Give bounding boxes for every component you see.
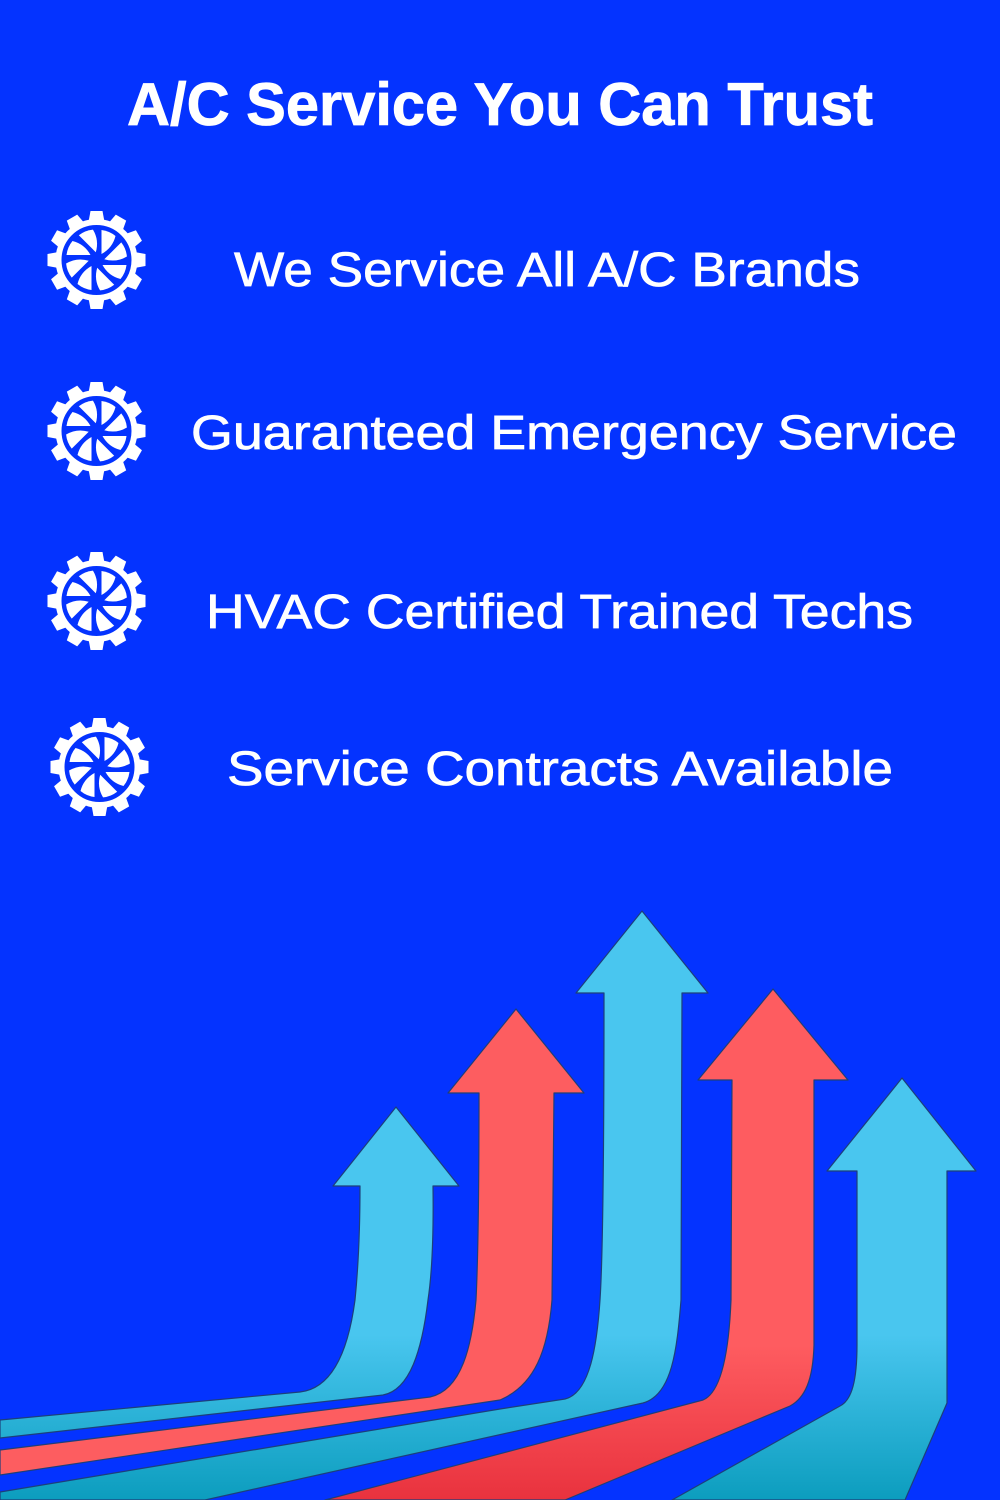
- feature row: emergency service: [48, 382, 957, 480]
- feature row: certified techs: [48, 552, 913, 650]
- feature text: service contracts: Service Contracts Available: [227, 743, 893, 796]
- icon: gear fan: [48, 211, 146, 309]
- feature row: service contracts: [50, 718, 893, 816]
- icon: gear fan: [48, 382, 146, 480]
- title: A/C Service You Can Trust: [127, 71, 873, 138]
- arrow: right blue: [672, 1078, 976, 1500]
- feature text: certified techs: HVAC Certified Trained Techs: [206, 586, 913, 639]
- arrow: tall blue: [0, 911, 708, 1500]
- arrow: red fourth: [325, 989, 848, 1500]
- feature row: all brands: [48, 211, 860, 309]
- rising arrows graphic: [0, 911, 976, 1500]
- arrow: small blue: [0, 1107, 459, 1438]
- icon: gear fan: [48, 552, 146, 650]
- feature text: all brands: We Service All A/C Brands: [234, 244, 860, 297]
- arrow: red second: [0, 1009, 584, 1475]
- feature text: emergency service: Guaranteed Emergency Service: [191, 407, 957, 460]
- icon: gear fan: [50, 718, 148, 816]
